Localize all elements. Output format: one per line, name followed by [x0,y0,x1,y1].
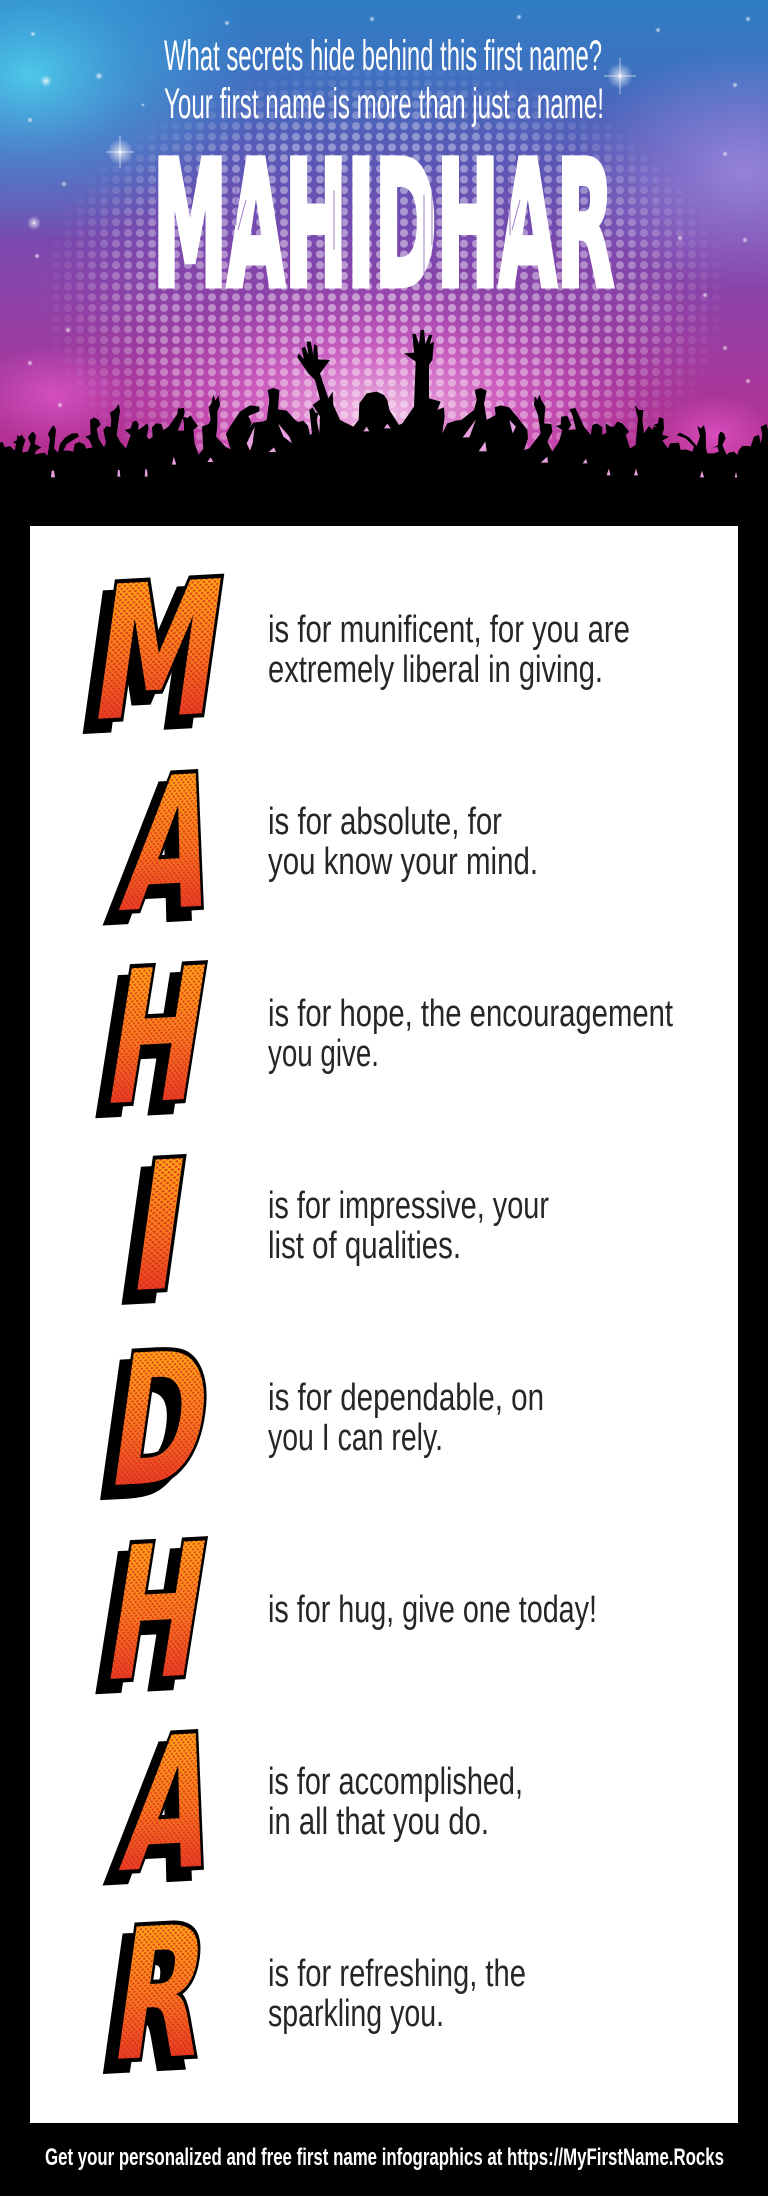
text: meaning of A: in all that you do. [268,1801,489,1843]
text: meaning of I: is for impressive, your [268,1185,549,1227]
text: meaning of D [268,1377,544,1459]
row: letter D [99,1313,544,1529]
icon: comic letter H: H [93,928,221,1148]
icon: comic letter A: A [111,735,232,954]
text: meaning of I [268,1185,549,1267]
row: letter M [80,540,630,763]
text: meaning of M: is for munificent, for you are [268,609,630,651]
header tagline [164,32,604,128]
row: letter I [118,1122,549,1333]
icon: comic letter M: M [80,540,238,763]
row: letter H [93,928,673,1148]
row: letter H second [93,1504,597,1724]
icon: comic letter H: H [93,1504,221,1724]
text: meaning of R: is for refreshing, the [268,1953,526,1995]
sparkling stars [27,14,751,408]
row: letter A [111,735,538,954]
icon: comic letter R: R [101,1888,220,2103]
row: letter A second [111,1695,523,1914]
text: meaning of D: is for dependable, on [268,1377,544,1419]
crowd silhouette [0,330,768,520]
row: letter R [101,1888,526,2103]
text: meaning of M [268,609,630,691]
text: meaning of A: is for absolute, for [268,801,502,843]
text: meaning of A [268,801,538,883]
text: meaning of A [268,1761,523,1843]
text: meaning of A: is for accomplished, [268,1761,523,1803]
icon: comic letter A: A [111,1695,232,1914]
icon: comic letter D: D [99,1313,223,1529]
text: meaning of H: is for hug, give one today! [268,1589,597,1631]
text: meaning of R [268,1953,526,2035]
icon: comic letter I: I [118,1122,201,1333]
text: meaning of H [268,993,673,1075]
header stage background [0,0,768,456]
text: meaning of A: you know your mind. [268,841,538,883]
text: meaning of I: list of qualities. [268,1225,461,1267]
text: meaning of H: you give. [268,1033,379,1075]
text: meaning of M: extremely liberal in giving. [268,649,603,691]
text: meaning of D: you I can rely. [268,1417,443,1459]
white content panel [30,526,738,2123]
text: meaning of R: sparkling you. [268,1993,444,2035]
